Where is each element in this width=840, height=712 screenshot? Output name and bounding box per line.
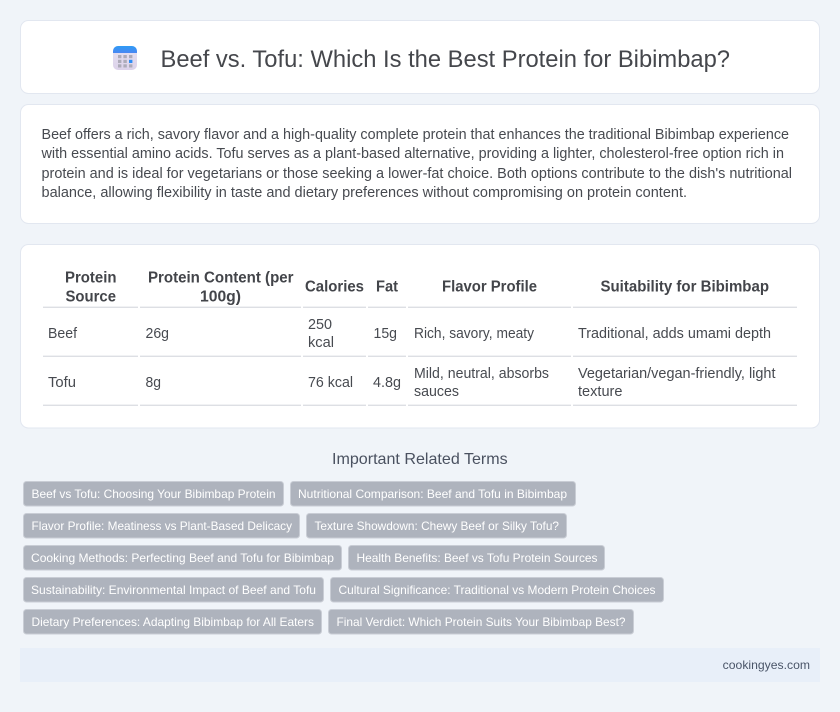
tag — [348, 546, 604, 570]
table row: tofu: texture — [578, 384, 622, 400]
tag: Dietary Preferences: Adapting Bibimbap for All Eaters — [32, 615, 314, 629]
text block: intro: with essential amino acids. Tofu serves as a plant-based alternative, providing a lighter, cholesterol-free option rich in — [41, 146, 784, 162]
tag — [24, 546, 342, 570]
tag: Health Benefits: Beef vs Tofu Protein Sources — [356, 551, 598, 565]
tag — [306, 514, 566, 538]
tag — [290, 482, 576, 506]
table row: tofu: Tofu — [48, 375, 76, 391]
icon: calendar — [113, 46, 137, 70]
tag: Flavor Profile: Meatiness vs Plant-Based Delicacy — [32, 519, 292, 533]
tag — [328, 610, 634, 634]
table row: beef: Rich, savory, meaty — [414, 326, 535, 342]
table row: tofu: 4.8g — [373, 375, 401, 391]
table row: beef — [48, 317, 771, 351]
table header row — [65, 270, 769, 306]
table header row: Fat — [376, 278, 399, 296]
text block: intro: protein and is ideal for vegetarians or those seeking a lower-fat choice. Both options contribute to the dish's nutritional — [42, 166, 792, 182]
tag: Cooking Methods: Perfecting Beef and Tofu for Bibimbap — [31, 551, 334, 565]
tag: Sustainability: Environmental Impact of Beef and Tofu — [31, 583, 316, 597]
tag: Cultural Significance: Traditional vs Modern Protein Choices — [338, 583, 656, 597]
table row: tofu: Vegetarian/vegan-friendly, light — [578, 366, 776, 382]
table row: beef: 15g — [374, 326, 397, 342]
tag — [24, 482, 284, 506]
table row: beef: kcal — [308, 335, 334, 351]
tag: Final Verdict: Which Protein Suits Your Bibimbap Best? — [336, 615, 626, 629]
table row: beef: 250 — [308, 317, 332, 333]
tag — [24, 578, 324, 602]
table row: tofu: Mild, neutral, absorbs — [414, 366, 549, 382]
panel: comparison table — [20, 244, 820, 428]
table row: beef: 26g — [146, 326, 169, 342]
table row: tofu — [48, 366, 776, 400]
table header row: Protein Content (per — [148, 270, 294, 286]
table header row: 100g) — [200, 288, 241, 306]
tag: Texture Showdown: Chewy Beef or Silky Tofu? — [314, 519, 559, 533]
table row: beef: Beef — [48, 326, 78, 342]
table row: tofu: sauces — [414, 384, 459, 400]
tag — [24, 514, 300, 538]
tag list: related terms — [24, 482, 664, 634]
footer source text: cookingyes.com — [723, 658, 810, 672]
table row: tofu: 76 kcal — [308, 375, 353, 391]
table header row: Flavor Profile — [442, 278, 537, 296]
table header row: Suitability for Bibimbap — [600, 278, 769, 296]
table header row: Source — [66, 288, 116, 306]
title: Beef vs. Tofu: Which Is the Best Protein for Bibimbap? — [160, 46, 730, 73]
text block: intro: Beef offers a rich, savory flavor and a high-quality complete protein that enhances the traditional Bibimbap experience — [42, 127, 789, 143]
text block: intro: balance, allowing flexibility in taste and dietary preferences without compromising on protein content. — [42, 185, 687, 201]
panel: intro paragraph — [20, 104, 820, 224]
heading: related terms: Important Related Terms — [332, 451, 508, 468]
table row: tofu: 8g — [146, 375, 161, 391]
table row: beef: Traditional, adds umami depth — [578, 326, 771, 342]
footer — [20, 648, 820, 682]
table header row: Calories — [305, 278, 364, 296]
tag: Beef vs Tofu: Choosing Your Bibimbap Protein — [32, 487, 276, 501]
tag — [330, 578, 664, 602]
table header row: Protein — [65, 270, 116, 286]
tag: Nutritional Comparison: Beef and Tofu in Bibimbap — [298, 487, 567, 501]
tag — [24, 610, 322, 634]
panel: title header — [20, 20, 820, 94]
text block: intro — [41, 127, 792, 201]
